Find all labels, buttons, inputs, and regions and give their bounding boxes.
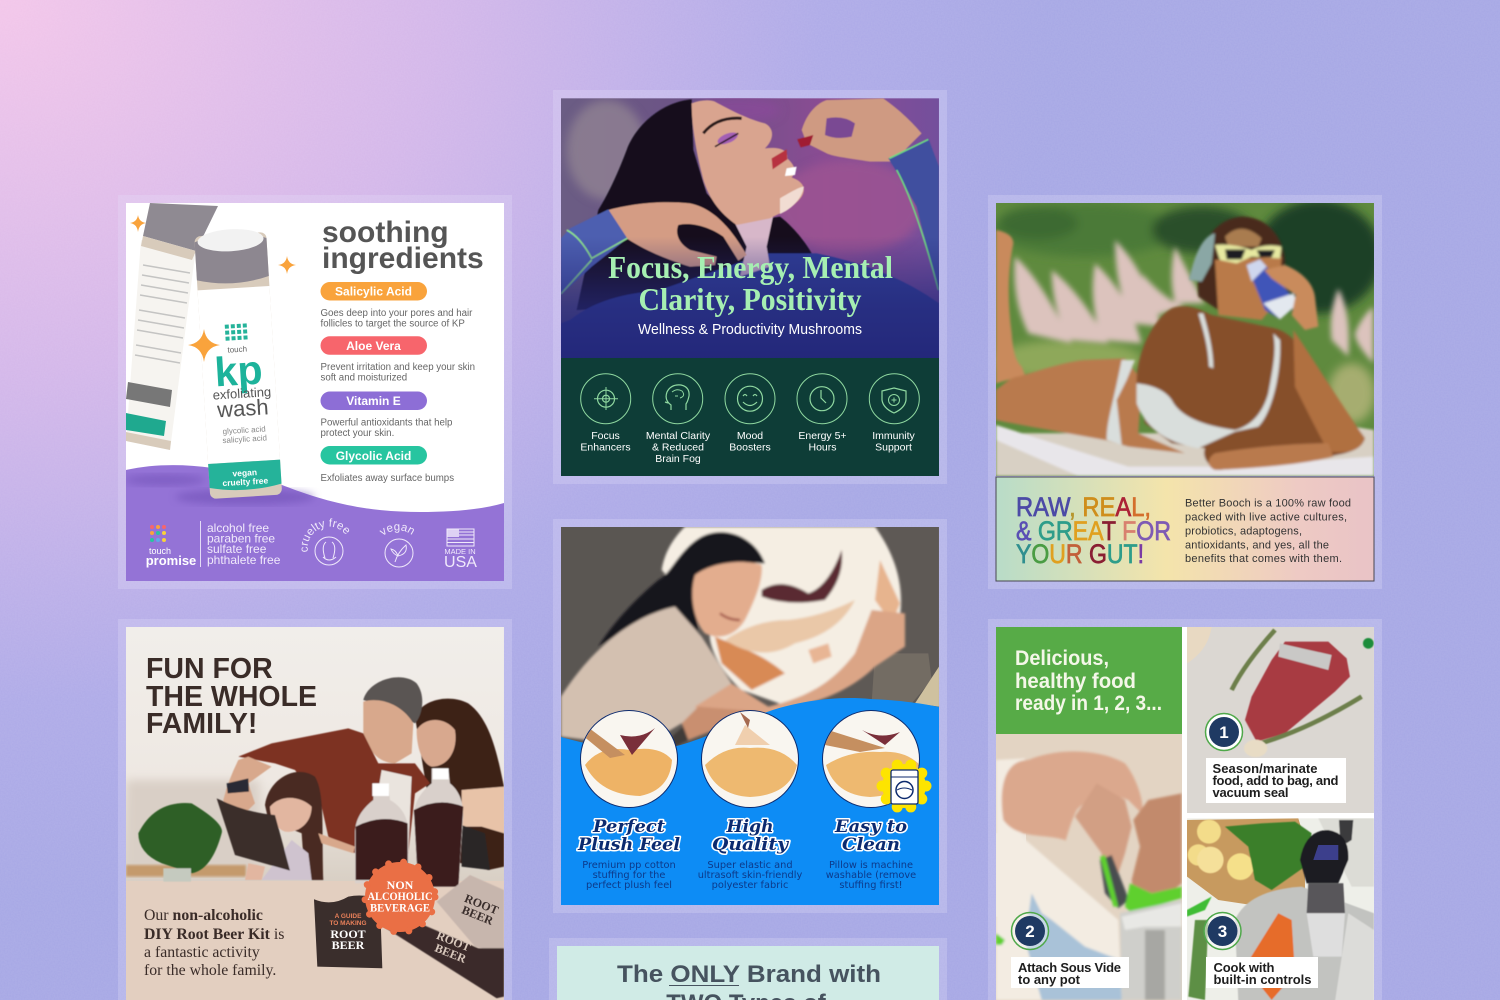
free-from list: phthalete free bbox=[207, 553, 281, 567]
feature: high quality: Quality bbox=[712, 835, 790, 854]
title: FAMILY! bbox=[146, 708, 257, 740]
better booch text: antioxidants, and yes, all the bbox=[1185, 540, 1329, 552]
feature: high quality: High bbox=[725, 817, 774, 836]
ingredient: Glycolic Acid: Glycolic Acid bbox=[336, 449, 411, 463]
green heading block: healthy food bbox=[1015, 670, 1136, 693]
shirt bbox=[561, 607, 732, 740]
raw real heading bbox=[1016, 492, 1171, 569]
kit description: a fantastic activity bbox=[144, 944, 260, 961]
panel: plush pillow bbox=[561, 527, 939, 905]
benefit: energy: Hours bbox=[808, 442, 837, 454]
benefit: immunity: Support bbox=[875, 442, 912, 454]
step 1 number bbox=[1206, 714, 1242, 750]
booklet label: BEER bbox=[332, 938, 365, 952]
booklet label: A GUIDE bbox=[335, 913, 362, 920]
icon: made in USA bbox=[445, 528, 477, 567]
ingredient: Aloe Vera: Prevent irritation and keep your skin bbox=[320, 362, 475, 373]
ingredient: Vitamin E: Vitamin E bbox=[346, 394, 401, 408]
benefit: mood: Mood bbox=[737, 430, 763, 442]
neck bbox=[735, 215, 773, 277]
heading: ingredients bbox=[322, 242, 484, 275]
hair bbox=[598, 532, 765, 647]
raw real heading: RAW, REAL, bbox=[1016, 492, 1151, 522]
kit description: for the whole family. bbox=[144, 962, 276, 979]
leg left bbox=[996, 230, 1025, 383]
product circle 3 bbox=[822, 710, 922, 810]
swimsuit bbox=[1137, 333, 1280, 448]
headline bbox=[608, 256, 892, 317]
right hand bbox=[802, 98, 922, 162]
plant bbox=[138, 803, 222, 873]
ingredient: Glycolic Acid bbox=[320, 446, 454, 484]
feature: perfect plush feel: Perfect bbox=[592, 817, 665, 836]
feature: easy to clean: Clean bbox=[842, 835, 900, 854]
icon: cruelty free bbox=[302, 518, 350, 566]
icon: front bottle: exfoliating bbox=[212, 384, 272, 403]
kit description: DIY Root Beer Kit is bbox=[144, 926, 284, 943]
badge: non alcoholic bbox=[365, 862, 435, 932]
open book bbox=[217, 798, 290, 871]
ingredient: Vitamin E bbox=[320, 392, 452, 439]
info band bbox=[996, 477, 1374, 581]
box label: BEER bbox=[433, 941, 469, 966]
badge: non alcoholic: NON bbox=[387, 878, 414, 892]
feature: easy to clean: washable (remove bbox=[826, 870, 916, 881]
ingredient: Salicylic Acid: Salicylic Acid bbox=[335, 284, 412, 298]
pillow bbox=[662, 527, 901, 707]
body bbox=[561, 253, 939, 360]
panel heading: The ONLY Brand with bbox=[617, 961, 881, 988]
forearm bbox=[1209, 443, 1333, 470]
benefit: immunity: Immunity bbox=[872, 430, 916, 442]
benefit: focus bbox=[580, 374, 631, 454]
kit description bbox=[144, 907, 284, 979]
photo: cooker bbox=[1187, 818, 1374, 1000]
icon: front bottle: touch bbox=[227, 344, 247, 355]
benefit: energy bbox=[797, 374, 847, 454]
right sleeve bbox=[888, 138, 939, 293]
ingredient: Vitamin E: protect your skin. bbox=[320, 428, 394, 439]
man bbox=[363, 677, 422, 723]
icon: vegan: vegan bbox=[380, 524, 414, 535]
left sleeve bbox=[561, 209, 627, 295]
better booch text: benefits that comes with them. bbox=[1185, 553, 1342, 565]
step 3 number bbox=[1204, 912, 1241, 950]
pampas bbox=[1014, 240, 1373, 363]
feature: perfect plush feel: Premium pp cotton bbox=[582, 860, 676, 871]
product circle 2 bbox=[701, 710, 801, 810]
title: THE WHOLE bbox=[146, 681, 317, 713]
free-from list: paraben free bbox=[207, 532, 275, 546]
badge: non alcoholic: ALCOHOLIC bbox=[368, 889, 432, 903]
feature: easy to clean: Easy to bbox=[834, 817, 907, 836]
benefits band bbox=[561, 358, 939, 476]
benefit: focus: Enhancers bbox=[580, 442, 631, 454]
better booch text: probiotics, adaptogens, bbox=[1185, 526, 1302, 538]
benefit: mental clarity: Brain Fog bbox=[655, 453, 701, 465]
badge: non alcoholic: BEVERAGE bbox=[370, 900, 430, 914]
benefit: energy: Energy 5+ bbox=[798, 430, 847, 442]
purple wave bbox=[126, 465, 504, 581]
feature: perfect plush feel bbox=[577, 817, 680, 891]
icon: vegan bbox=[380, 524, 414, 568]
torso bbox=[1137, 306, 1365, 470]
panel heading bbox=[617, 961, 881, 1000]
booklet label: ROOT bbox=[330, 927, 366, 941]
ingredient: Vitamin E: Powerful antioxidants that help bbox=[320, 418, 452, 428]
box label: ROOT bbox=[434, 928, 473, 954]
step 1 label: vacuum seal bbox=[1212, 785, 1288, 800]
icon: front bottle: wash bbox=[215, 394, 269, 422]
title bbox=[146, 653, 317, 740]
ingredient: Aloe Vera: Aloe Vera bbox=[346, 339, 401, 353]
can bbox=[1247, 259, 1298, 319]
touch promise bbox=[146, 525, 196, 568]
benefit: immunity bbox=[869, 374, 919, 454]
step 1 label bbox=[1206, 758, 1346, 803]
face bbox=[692, 100, 804, 225]
icon: back bottle bbox=[126, 203, 218, 450]
product circle 1 bbox=[580, 710, 680, 810]
step 3 label: built-in controls bbox=[1214, 972, 1312, 987]
ingredient: Aloe Vera: soft and moisturized bbox=[320, 372, 407, 384]
free-from list: alcohol free bbox=[207, 521, 269, 535]
benefit: mental clarity: Mental Clarity bbox=[646, 430, 711, 442]
deck and towel bbox=[996, 426, 1374, 476]
head bbox=[1198, 217, 1285, 310]
green heading block: ready in 1, 2, 3... bbox=[1015, 692, 1162, 715]
benefit: mood: Boosters bbox=[729, 442, 771, 454]
device bbox=[1339, 820, 1353, 843]
feature: perfect plush feel: perfect plush feel bbox=[586, 880, 672, 891]
benefit: mental clarity: & Reduced bbox=[652, 442, 704, 454]
kit description: Our non-alcoholic bbox=[144, 907, 263, 924]
step 2 label: to any pot bbox=[1018, 972, 1081, 987]
badge: washing machine bbox=[882, 764, 926, 808]
ingredient: Glycolic Acid: Exfoliates away surface bumps bbox=[320, 473, 454, 484]
title: FUN FOR bbox=[146, 653, 273, 685]
heading: soothing bbox=[322, 216, 449, 249]
panel: raw real kombucha photo bbox=[992, 200, 1382, 476]
icon: cruelty free: cruelty free bbox=[302, 518, 350, 552]
icon: front bottle: cruelty free bbox=[222, 475, 269, 488]
feature: high quality: ultrasoft skin-friendly bbox=[698, 870, 802, 881]
feature: high quality bbox=[698, 817, 802, 891]
photo: woman hugging pillow bbox=[561, 527, 939, 747]
left hand bbox=[608, 202, 747, 267]
feature: high quality: Super elastic and bbox=[707, 860, 793, 871]
touch promise: touch bbox=[149, 546, 171, 556]
feature: easy to clean: stuffing first! bbox=[839, 880, 903, 891]
step 1 label: food, add to bag, and bbox=[1212, 773, 1339, 788]
box label bbox=[433, 891, 501, 966]
panel: sous vide bbox=[996, 627, 1374, 1000]
icon: front bottle: glycolic acid bbox=[222, 424, 266, 436]
booklet bbox=[314, 896, 382, 968]
better booch text: Better Booch is a 100% raw food bbox=[1185, 498, 1351, 510]
bottles bbox=[355, 783, 408, 883]
photo: attach to pot bbox=[996, 734, 1183, 1000]
right arm bbox=[1293, 330, 1365, 452]
touch promise: promise bbox=[146, 553, 196, 568]
booklet label bbox=[329, 913, 367, 952]
feature: high quality: polyester fabric bbox=[712, 880, 788, 891]
step 1 number: 1 bbox=[1219, 723, 1229, 742]
purple shadow ellipse bbox=[175, 489, 315, 505]
hair bbox=[577, 99, 817, 310]
feature: easy to clean bbox=[826, 817, 916, 891]
woman bbox=[415, 699, 504, 870]
arm bbox=[695, 610, 905, 727]
green heading block: Delicious, bbox=[1015, 647, 1109, 670]
ingredient: Aloe Vera bbox=[320, 336, 475, 384]
box bbox=[437, 875, 504, 953]
step 2 number bbox=[1012, 912, 1048, 950]
hips bbox=[996, 358, 1185, 453]
subtitle: Wellness & Productivity Mushrooms bbox=[638, 322, 862, 338]
headline: Clarity, Positivity bbox=[638, 281, 862, 317]
step 3 label bbox=[1206, 957, 1318, 988]
blue panel bbox=[561, 698, 939, 905]
icon: front bottle bbox=[194, 227, 282, 499]
better booch text: packed with live active cultures, bbox=[1185, 512, 1347, 524]
box label: BEER bbox=[460, 903, 496, 928]
benefit: focus: Focus bbox=[591, 430, 620, 442]
step 3 label: Cook with bbox=[1214, 960, 1275, 975]
icon: sparkles bbox=[130, 215, 296, 362]
headline: Focus, Energy, Mental bbox=[608, 249, 893, 285]
icon: front bottle: salicylic acid bbox=[222, 433, 267, 445]
child bbox=[265, 772, 323, 880]
booklet label: TO MAKING bbox=[329, 920, 367, 927]
ingredient: Salicylic Acid: follicles to target the source of KP bbox=[320, 318, 465, 330]
feature: perfect plush feel: Plush Feel bbox=[577, 835, 680, 854]
feature: easy to clean: Pillow is machine bbox=[829, 860, 913, 871]
panel: root beer kit bbox=[126, 627, 504, 1000]
step 2 label: Attach Sous Vide bbox=[1018, 960, 1121, 975]
face bbox=[692, 562, 762, 637]
free-from list: sulfate free bbox=[207, 542, 267, 556]
step 2 number: 2 bbox=[1025, 922, 1035, 941]
icon: front bottle: kp bbox=[213, 347, 264, 395]
heading bbox=[323, 220, 482, 274]
feature: perfect plush feel: stuffing for the bbox=[593, 870, 665, 881]
ingredient: Salicylic Acid: Goes deep into your pores and hair bbox=[320, 308, 473, 319]
step 3 number: 3 bbox=[1218, 922, 1227, 941]
icon: made in USA: USA bbox=[444, 554, 477, 571]
better booch text bbox=[1185, 498, 1351, 565]
raw real heading: & GREAT FOR bbox=[1016, 516, 1171, 546]
free-from list bbox=[200, 521, 281, 567]
raw real heading: YOUR GUT! bbox=[1016, 539, 1144, 569]
benefit: mental clarity bbox=[646, 374, 711, 465]
green heading block bbox=[996, 627, 1182, 734]
icon: front bottle: vegan bbox=[232, 467, 257, 479]
photo: woman eating gummy bbox=[561, 97, 939, 365]
step 1 label: Season/marinate bbox=[1212, 761, 1318, 776]
ingredient: Salicylic Acid bbox=[320, 282, 473, 330]
panel: focus energy mushrooms bbox=[561, 97, 939, 476]
panel: the only brand bbox=[557, 946, 939, 1000]
box label: ROOT bbox=[462, 891, 501, 917]
photo: steak bbox=[1187, 627, 1374, 813]
icon: made in USA: MADE IN bbox=[444, 547, 476, 556]
step 2 label bbox=[1011, 957, 1129, 988]
panel: soothing ingredients bbox=[126, 203, 504, 581]
sunglasses bbox=[1215, 245, 1282, 263]
benefit: mood bbox=[725, 374, 775, 454]
hand bbox=[1264, 265, 1318, 330]
panel frame: halos bbox=[118, 90, 1382, 1000]
